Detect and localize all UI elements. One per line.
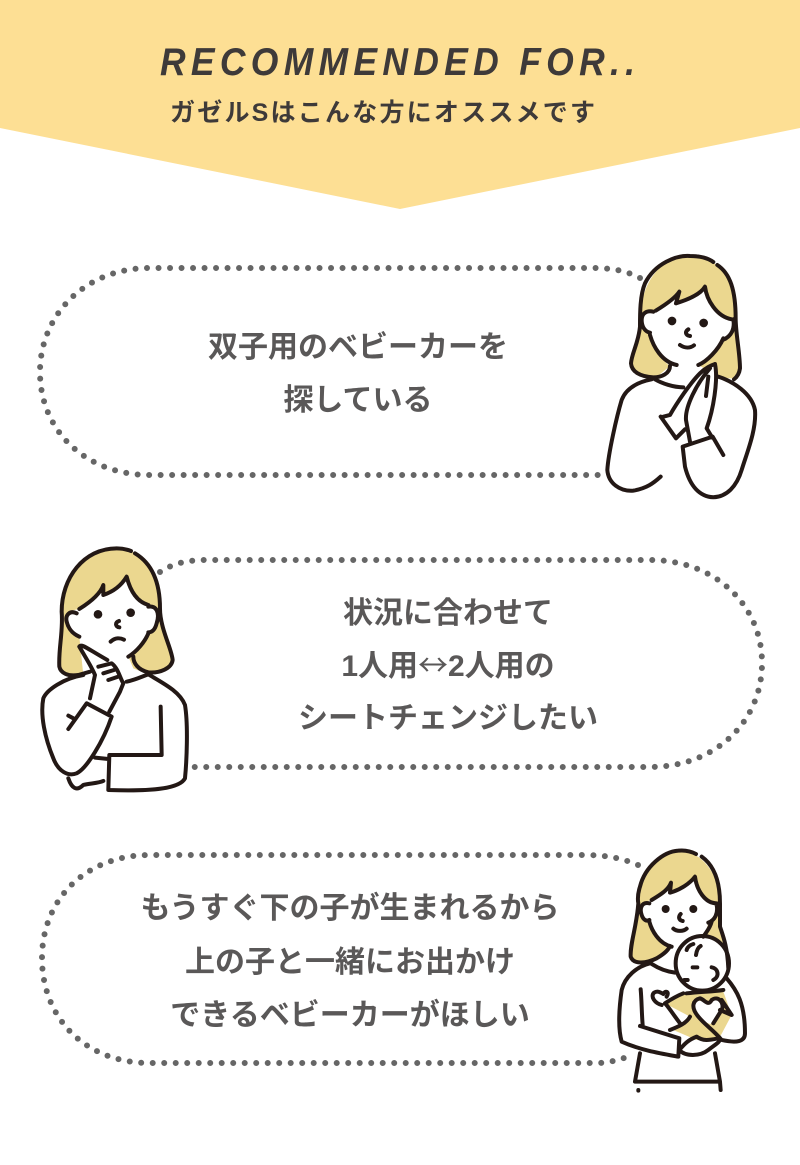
text: bubble 3: できるベビーカーがほしい [170,998,530,1032]
header banner [0,0,800,209]
subtitle: ガゼルSはこんな方にオススメです [170,98,595,127]
icon: thinking woman [42,548,187,790]
dotted speech bubble 3 [42,855,638,1063]
panel: twin stroller [40,256,755,497]
text: bubble 3 [140,891,560,1032]
panel: seat change [42,548,762,790]
text: bubble 2: シートチェンジしたい [298,702,598,735]
text: bubble 2: 1人用↔2人用の [341,641,555,685]
icon: woman with hands together [607,256,755,497]
icon: woman holding baby [619,851,745,1091]
text: bubble 1 [208,331,508,417]
text: bubble 1: 探している [283,384,433,417]
text: bubble 1: 双子用のベビーカーを [208,331,508,364]
text: bubble 2 [298,597,598,735]
panel: second baby [42,851,745,1091]
dotted speech bubble 1 [40,268,640,475]
text: bubble 3: もうすぐ下の子が生まれるから [140,891,560,925]
text: bubble 2: 状況に合わせて [343,597,553,630]
dotted speech bubble 2 [160,560,762,767]
text: bubble 3: 上の子と一緒にお出かけ [185,946,515,979]
title: RECOMMENDED FOR.. [160,39,635,83]
